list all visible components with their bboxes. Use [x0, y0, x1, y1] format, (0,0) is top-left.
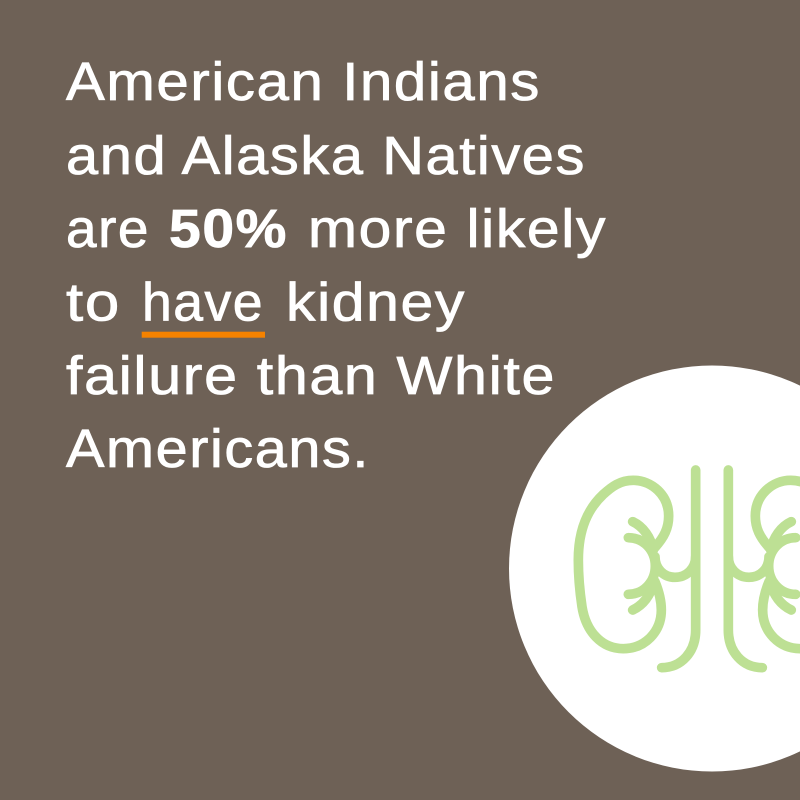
headline text: more likely — [308, 199, 607, 259]
headline text: American Indians — [66, 52, 541, 112]
headline text: and Alaska Natives — [66, 126, 586, 186]
headline text: failure than White — [66, 346, 556, 406]
icon: kidneys — [578, 470, 800, 668]
headline text: kidney — [286, 272, 466, 332]
headline text: have — [142, 272, 264, 332]
white circle — [509, 366, 800, 772]
orange underline — [142, 332, 265, 338]
headline text: to — [66, 272, 121, 332]
headline text — [66, 52, 607, 479]
headline text: 50% — [169, 199, 288, 259]
headline text: Americans. — [66, 419, 370, 479]
headline text: are — [66, 199, 150, 259]
